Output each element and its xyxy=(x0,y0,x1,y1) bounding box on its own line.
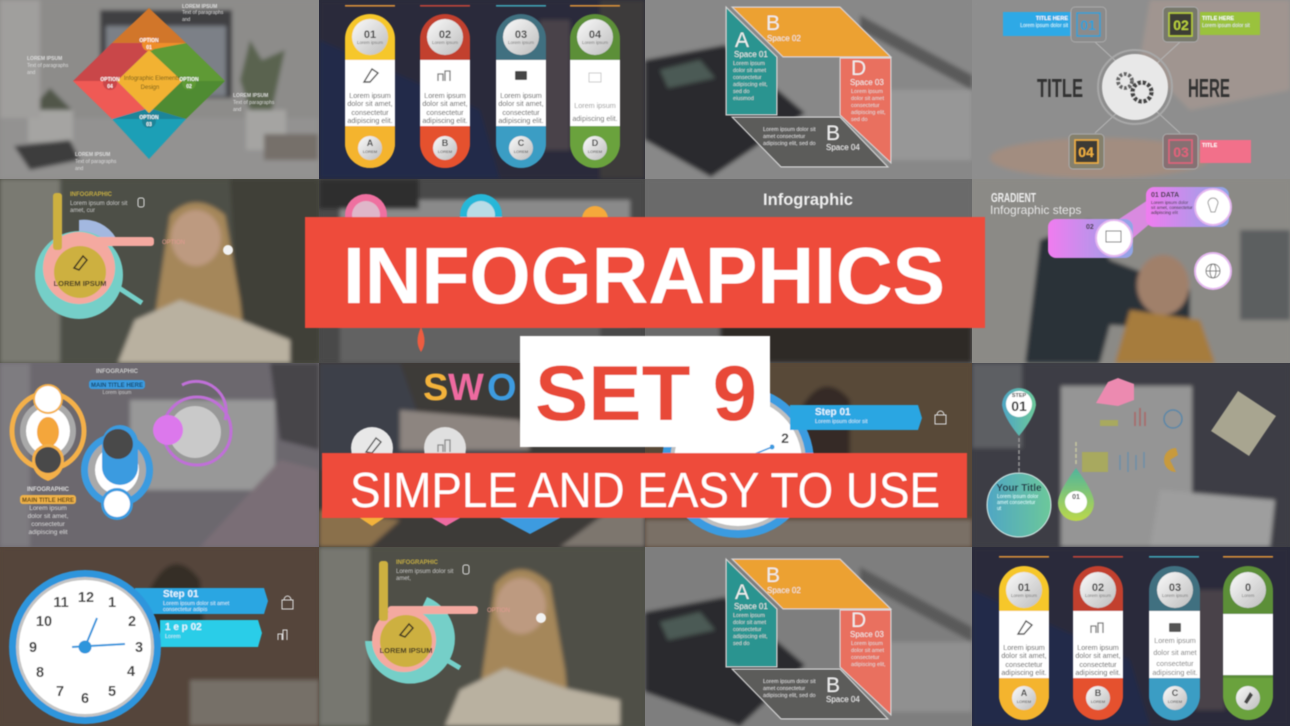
orange caption: adipiscing elit xyxy=(28,529,68,536)
label 01 xyxy=(1003,7,1106,42)
four-step pills top xyxy=(345,5,620,168)
clock numbers: 11 xyxy=(53,595,69,611)
step 02: 02 xyxy=(1086,224,1094,231)
cube body text: consectetur xyxy=(851,655,880,661)
clock behind banner xyxy=(662,386,946,538)
orange caption: INFOGRAPHIC xyxy=(27,487,70,493)
step label xyxy=(790,405,922,430)
photo: woman with phone xyxy=(645,363,972,547)
gradient steps xyxy=(990,187,1231,289)
centre label: Infographic Elements xyxy=(124,76,180,82)
photo: meeting room xyxy=(645,179,972,363)
pill 04: LOREM xyxy=(588,149,602,154)
cube body text: adipiscing elit, xyxy=(733,634,768,640)
gear infographic xyxy=(1003,7,1260,169)
your title bubble: ut xyxy=(997,506,1002,512)
photo: laptop and notebook xyxy=(319,179,645,363)
cube body text: dolor sit amet xyxy=(733,68,766,74)
option badges: OPTION xyxy=(100,77,120,83)
cube labels: B xyxy=(826,122,840,145)
cube body text: amet consectetur xyxy=(763,134,805,140)
heading: INFOGRAPHIC xyxy=(70,192,113,198)
photo: calculator repeat xyxy=(645,547,972,726)
cube labels: A xyxy=(735,29,749,52)
SWO heading: S xyxy=(423,367,448,409)
clock numbers: 3 xyxy=(135,640,143,656)
purple ring xyxy=(153,381,231,465)
clock numbers: 10 xyxy=(36,614,52,630)
orange ring xyxy=(12,384,84,481)
pill 01: Lorem ipsum xyxy=(1011,593,1037,598)
pin step 01 xyxy=(1002,388,1036,436)
cube body text: adipiscing elit, xyxy=(733,82,768,88)
pen icon xyxy=(74,256,87,270)
photo: corridor repeat xyxy=(972,547,1290,726)
cube body text: Lorem ipsum dolor sit xyxy=(763,127,816,133)
clock numbers: 1 xyxy=(108,595,116,611)
clock numbers: 8 xyxy=(36,665,44,681)
step label: Lorem ipsum dolor sit xyxy=(815,419,868,425)
pen icon xyxy=(400,624,413,637)
clock numbers: 6 xyxy=(81,691,89,707)
heading: OPTION xyxy=(487,608,510,614)
cube labels: D xyxy=(851,57,866,80)
orange caption: dolor sit amet, xyxy=(28,513,69,520)
heading: Lorem ipsum dolor sit xyxy=(70,201,128,207)
pill 01 xyxy=(345,5,395,168)
chart desk infographic xyxy=(987,378,1276,537)
photo: calculator and papers xyxy=(645,0,972,179)
your title bubble: amet consectetur xyxy=(997,500,1036,506)
diamond captions: and xyxy=(233,107,242,113)
cube body text: sed do xyxy=(733,641,750,647)
pill 02: 02 xyxy=(439,29,451,41)
label 03: 03 xyxy=(1173,144,1189,160)
heading: Infographic steps xyxy=(990,203,1081,217)
photo: hand over sketches xyxy=(972,0,1290,179)
pill 01: Lorem ipsum xyxy=(357,40,383,45)
label 02 xyxy=(1163,7,1260,42)
step labels: consectetur adipis xyxy=(163,607,208,613)
cube body text: Lorem ipsum xyxy=(851,89,883,95)
photo: hands on keyboard xyxy=(319,363,645,547)
cube labels: Space 01 xyxy=(734,50,768,59)
chart desk infographic: 01 xyxy=(1072,494,1080,501)
banner: SET 9 xyxy=(520,336,770,447)
SWO heading xyxy=(423,367,517,409)
heading: amet, cur xyxy=(70,208,95,214)
your title bubble: Lorem ipsum dolor xyxy=(997,494,1039,500)
pill 01: A xyxy=(367,138,374,148)
cube labels: B xyxy=(766,564,780,587)
drop marker xyxy=(1075,442,1077,466)
option badges: OPTION xyxy=(139,38,159,44)
option badges: 04 xyxy=(107,84,113,90)
clock numbers: 5 xyxy=(108,684,116,700)
label 02: Lorem ipsum dolor sit xyxy=(1202,23,1250,29)
pill 01: consectetur xyxy=(351,108,389,117)
pill 03: dolor sit amet xyxy=(1153,648,1197,657)
pin step 01: STEP xyxy=(1012,393,1027,399)
pill 04: 0 xyxy=(1245,582,1251,594)
pill 04: Lorem ipsum xyxy=(582,40,608,45)
cube body text: sed do xyxy=(733,89,750,95)
your title bubble: Your Title xyxy=(996,483,1042,494)
pill 02: LOREM xyxy=(438,149,452,154)
pill 03: Lorem ipsum xyxy=(1154,636,1196,645)
pill 04: Lorem xyxy=(1242,593,1255,598)
cube body text xyxy=(733,61,886,147)
clock infographic xyxy=(9,570,293,724)
step label: Step 01 xyxy=(815,407,851,418)
photo: presentation board xyxy=(0,363,319,547)
pill 01: LOREM xyxy=(363,149,377,154)
cube labels: B xyxy=(826,674,840,697)
cube infographic bottom xyxy=(726,559,891,719)
heading: GRADIENT xyxy=(991,190,1036,205)
orange caption xyxy=(20,487,76,536)
photo: woman outdoors xyxy=(0,179,319,363)
pill 02: 02 xyxy=(1092,582,1104,594)
infographic heading: Infographic xyxy=(763,190,853,209)
pill 02: dolor sit amet, xyxy=(1075,651,1121,660)
pill 03: C xyxy=(518,138,525,148)
pill 02 xyxy=(420,5,470,168)
diamond captions: LOREM IPSUM xyxy=(233,93,268,99)
pin step 01: 01 xyxy=(1011,398,1027,414)
cube body text: consectetur xyxy=(733,627,762,633)
diamond captions: Text of paragraphs xyxy=(27,63,69,69)
banner: tagline: SIMPLE AND EASY TO USE xyxy=(350,464,940,518)
label 02: TITLE HERE xyxy=(1202,16,1234,22)
pill 03: consectetur xyxy=(1156,659,1194,668)
pill 04: 04 xyxy=(589,29,602,41)
pink note xyxy=(1096,378,1134,406)
orange caption: consectetur xyxy=(31,521,66,528)
diamond captions: and xyxy=(182,17,191,23)
pill 01: A xyxy=(1021,688,1028,698)
four-step pills bottom xyxy=(999,556,1273,721)
option badges: 03 xyxy=(146,122,152,128)
option badges: 01 xyxy=(146,45,152,51)
orange caption: MAIN TITLE HERE xyxy=(22,498,74,504)
label 03 xyxy=(1163,134,1251,169)
cube labels: Space 03 xyxy=(850,78,884,87)
step labels: Lorem ipsum dolor sit amet xyxy=(163,601,230,607)
pill 03: C xyxy=(1172,688,1179,698)
diamond captions: and xyxy=(75,166,84,172)
blue caption: Lorem ipsum xyxy=(103,390,131,396)
clock numbers: 4 xyxy=(127,664,135,680)
pill 02: B xyxy=(442,138,449,148)
heading: Lorem ipsum dolor sit xyxy=(396,569,454,575)
clock numbers: 2 xyxy=(128,614,136,630)
pill 01: Lorem ipsum xyxy=(349,91,391,100)
step 01: adipiscing elit xyxy=(1151,210,1179,215)
photo: woman outdoors repeat xyxy=(319,547,645,726)
orange caption: Lorem ipsum xyxy=(29,505,67,512)
pill 01: 01 xyxy=(1018,582,1030,594)
pill 01: dolor sit amet, xyxy=(1001,651,1047,660)
clock face xyxy=(9,570,161,724)
pill 03: Lorem ipsum xyxy=(508,40,534,45)
diamond captions: Text of paragraphs xyxy=(233,100,275,106)
cube body text: Lorem ipsum xyxy=(733,613,765,619)
cube body text: dolor sit amet xyxy=(851,96,884,102)
heading xyxy=(990,190,1081,217)
cube body text: adipiscing elit, sed do xyxy=(763,141,816,147)
photo: woman with phone left xyxy=(0,547,319,726)
SWO heading: W xyxy=(448,367,484,409)
centre diamond xyxy=(117,50,182,113)
pill 03 xyxy=(1149,556,1200,721)
paper charts xyxy=(1082,408,1182,472)
pill 01: adipiscing elit. xyxy=(347,116,393,125)
step 02 xyxy=(1048,219,1133,258)
SWO heading: O xyxy=(487,367,517,409)
label 01: Lorem ipsum dolor sit xyxy=(1020,23,1069,29)
diamond infographic xyxy=(27,4,275,172)
centre label: Design xyxy=(141,85,159,91)
cube infographic top xyxy=(726,7,891,167)
cube labels xyxy=(734,564,884,704)
pill 02: adipiscing elit. xyxy=(1075,668,1121,677)
pill 01: dolor sit amet, xyxy=(347,99,393,108)
label 01: TITLE HERE xyxy=(1036,16,1068,22)
label 02: 02 xyxy=(1173,17,1189,33)
cube body text: adipiscing elit, xyxy=(851,110,886,116)
circular infographic with magnifier xyxy=(35,192,233,319)
cube body text: eiusmod xyxy=(733,96,754,102)
pill 03: LOREM xyxy=(1168,699,1182,704)
diamond captions xyxy=(27,4,275,172)
cube body text: Lorem ipsum dolor sit xyxy=(763,679,816,685)
step 01 xyxy=(1146,187,1231,227)
SWO icons and pointers xyxy=(351,427,560,534)
option badges xyxy=(100,37,199,128)
yellow note xyxy=(1211,391,1276,456)
heading xyxy=(396,560,546,623)
blue caption: INFOGRAPHIC xyxy=(96,369,139,375)
label 04: 04 xyxy=(1078,144,1094,160)
step 01: 01 DATA xyxy=(1151,192,1179,199)
step icons xyxy=(278,596,293,640)
blue ring xyxy=(81,425,153,520)
circle caption: LOREM IPSUM xyxy=(380,646,432,655)
diamond captions: LOREM IPSUM xyxy=(75,152,110,158)
step labels: Step 01 xyxy=(163,589,199,600)
pill 01: 01 xyxy=(364,29,376,41)
circle caption: LOREM IPSUM xyxy=(54,279,106,288)
lock icon xyxy=(935,411,946,424)
pill 04: Lorem ipsum xyxy=(574,101,616,110)
cube body text: adipiscing elit, sed do xyxy=(763,693,816,699)
cube body text: Lorem ipsum xyxy=(851,641,883,647)
pill 02: B xyxy=(1095,688,1102,698)
cube labels: D xyxy=(851,609,866,632)
step 03 globe xyxy=(1195,253,1231,289)
your title bubble xyxy=(987,473,1051,537)
label 01: 01 xyxy=(1080,17,1096,33)
photo: two men shaking hands xyxy=(972,179,1290,363)
cube labels: Space 03 xyxy=(850,630,884,639)
cube body text xyxy=(733,613,886,699)
cube labels: Space 02 xyxy=(767,586,801,595)
pill 03: Lorem ipsum xyxy=(500,91,542,100)
clock hands xyxy=(72,618,125,654)
clock behind banner: 2 xyxy=(781,430,789,446)
central gear xyxy=(1098,50,1172,124)
heading: amet, xyxy=(396,576,411,582)
photo: desk with charts xyxy=(972,363,1290,547)
pill 02: Lorem ipsum xyxy=(1077,643,1119,652)
pill 02: LOREM xyxy=(1091,699,1105,704)
cube labels: B xyxy=(766,12,780,35)
option badges: OPTION xyxy=(139,115,159,121)
pill 02: consectetur xyxy=(1079,660,1117,669)
diamond captions: LOREM IPSUM xyxy=(182,4,217,10)
blue caption xyxy=(89,369,145,396)
pill 04 xyxy=(570,5,620,168)
centre label xyxy=(124,76,180,91)
pill 03: adipiscing elit. xyxy=(498,116,544,125)
diamond captions: LOREM IPSUM xyxy=(27,56,62,62)
pill 02: Lorem ipsum xyxy=(424,91,466,100)
cube body text: consectetur xyxy=(733,75,762,81)
cube labels: Space 01 xyxy=(734,602,768,611)
clock numbers: 7 xyxy=(56,684,64,700)
pill 02 xyxy=(1073,556,1123,720)
pill 03: 03 xyxy=(1169,582,1181,594)
cube labels xyxy=(734,12,884,152)
pill 04 xyxy=(1223,556,1273,720)
pill 02: Lorem ipsum xyxy=(1085,593,1111,598)
cube body text: adipiscing elit, xyxy=(851,662,886,668)
cube labels: Space 02 xyxy=(767,34,801,43)
cube labels: Space 04 xyxy=(826,695,860,704)
option badges: 02 xyxy=(186,84,192,90)
heading: OPTION xyxy=(162,240,185,246)
pill 01: Lorem ipsum xyxy=(1003,643,1045,652)
label 03: TITLE xyxy=(1202,143,1218,149)
diamond captions: Text of paragraphs xyxy=(182,10,224,16)
title words: TITLE xyxy=(1037,73,1083,103)
pill 03: dolor sit amet, xyxy=(498,99,544,108)
cube body text: amet consectetur xyxy=(763,686,805,692)
pill 01: LOREM xyxy=(1017,699,1031,704)
cube labels: Space 04 xyxy=(826,143,860,152)
label 04 xyxy=(1069,134,1104,169)
cube labels: A xyxy=(735,581,749,604)
photo: desk with plants xyxy=(0,0,319,179)
step 01: sit amet, consectetur xyxy=(1151,205,1193,210)
pill 01: adipiscing elit. xyxy=(1001,668,1047,677)
clock numbers xyxy=(29,590,143,707)
circular infographic repeat xyxy=(365,560,546,684)
step labels: Lorem xyxy=(165,634,181,640)
pill 02: consectetur xyxy=(426,108,464,117)
pill 04: D xyxy=(592,138,599,148)
clock numbers: 9 xyxy=(29,640,37,656)
photo: office corridor with woman xyxy=(319,0,645,179)
diamond captions: Text of paragraphs xyxy=(75,159,117,165)
pill 03 xyxy=(496,5,546,168)
title words xyxy=(1037,73,1230,103)
step labels xyxy=(135,588,268,647)
overlapping rings infographic xyxy=(12,369,231,536)
heading xyxy=(70,192,233,255)
title words: HERE xyxy=(1188,73,1230,103)
pill 01 xyxy=(999,556,1049,720)
step 01: Lorem ipsum dolor xyxy=(1151,200,1189,205)
banner: SET 9: SET 9 xyxy=(535,349,757,437)
pill 01: consectetur xyxy=(1005,660,1043,669)
pill 02: adipiscing elit. xyxy=(422,116,468,125)
banner: INFOGRAPHICS: INFOGRAPHICS xyxy=(343,231,945,320)
pill 02: Lorem ipsum xyxy=(432,40,458,45)
step labels: 1 e p 02 xyxy=(165,622,202,633)
pill 04: adipiscing elit. xyxy=(572,114,618,123)
pill 03: 03 xyxy=(515,29,527,41)
cube body text: sed do xyxy=(851,117,868,123)
cube body text: dolor sit amet xyxy=(851,648,884,654)
cube body text: consectetur xyxy=(851,103,880,109)
cube body text: dolor sit amet xyxy=(733,620,766,626)
option badges: OPTION xyxy=(179,77,199,83)
pill 03: LOREM xyxy=(514,149,528,154)
diamond captions: and xyxy=(27,70,36,76)
pill 03: Lorem ipsum xyxy=(1162,593,1188,598)
circles peeking behind banner xyxy=(345,194,608,352)
blue caption: MAIN TITLE HERE xyxy=(91,383,143,389)
cube body text: Lorem ipsum xyxy=(733,61,765,67)
pill 02: dolor sit amet, xyxy=(422,99,468,108)
pill 03: adipiscing elit. xyxy=(1152,668,1198,677)
pill 03: consectetur xyxy=(502,108,540,117)
heading: INFOGRAPHIC xyxy=(396,560,439,566)
clock numbers: 12 xyxy=(78,590,94,606)
